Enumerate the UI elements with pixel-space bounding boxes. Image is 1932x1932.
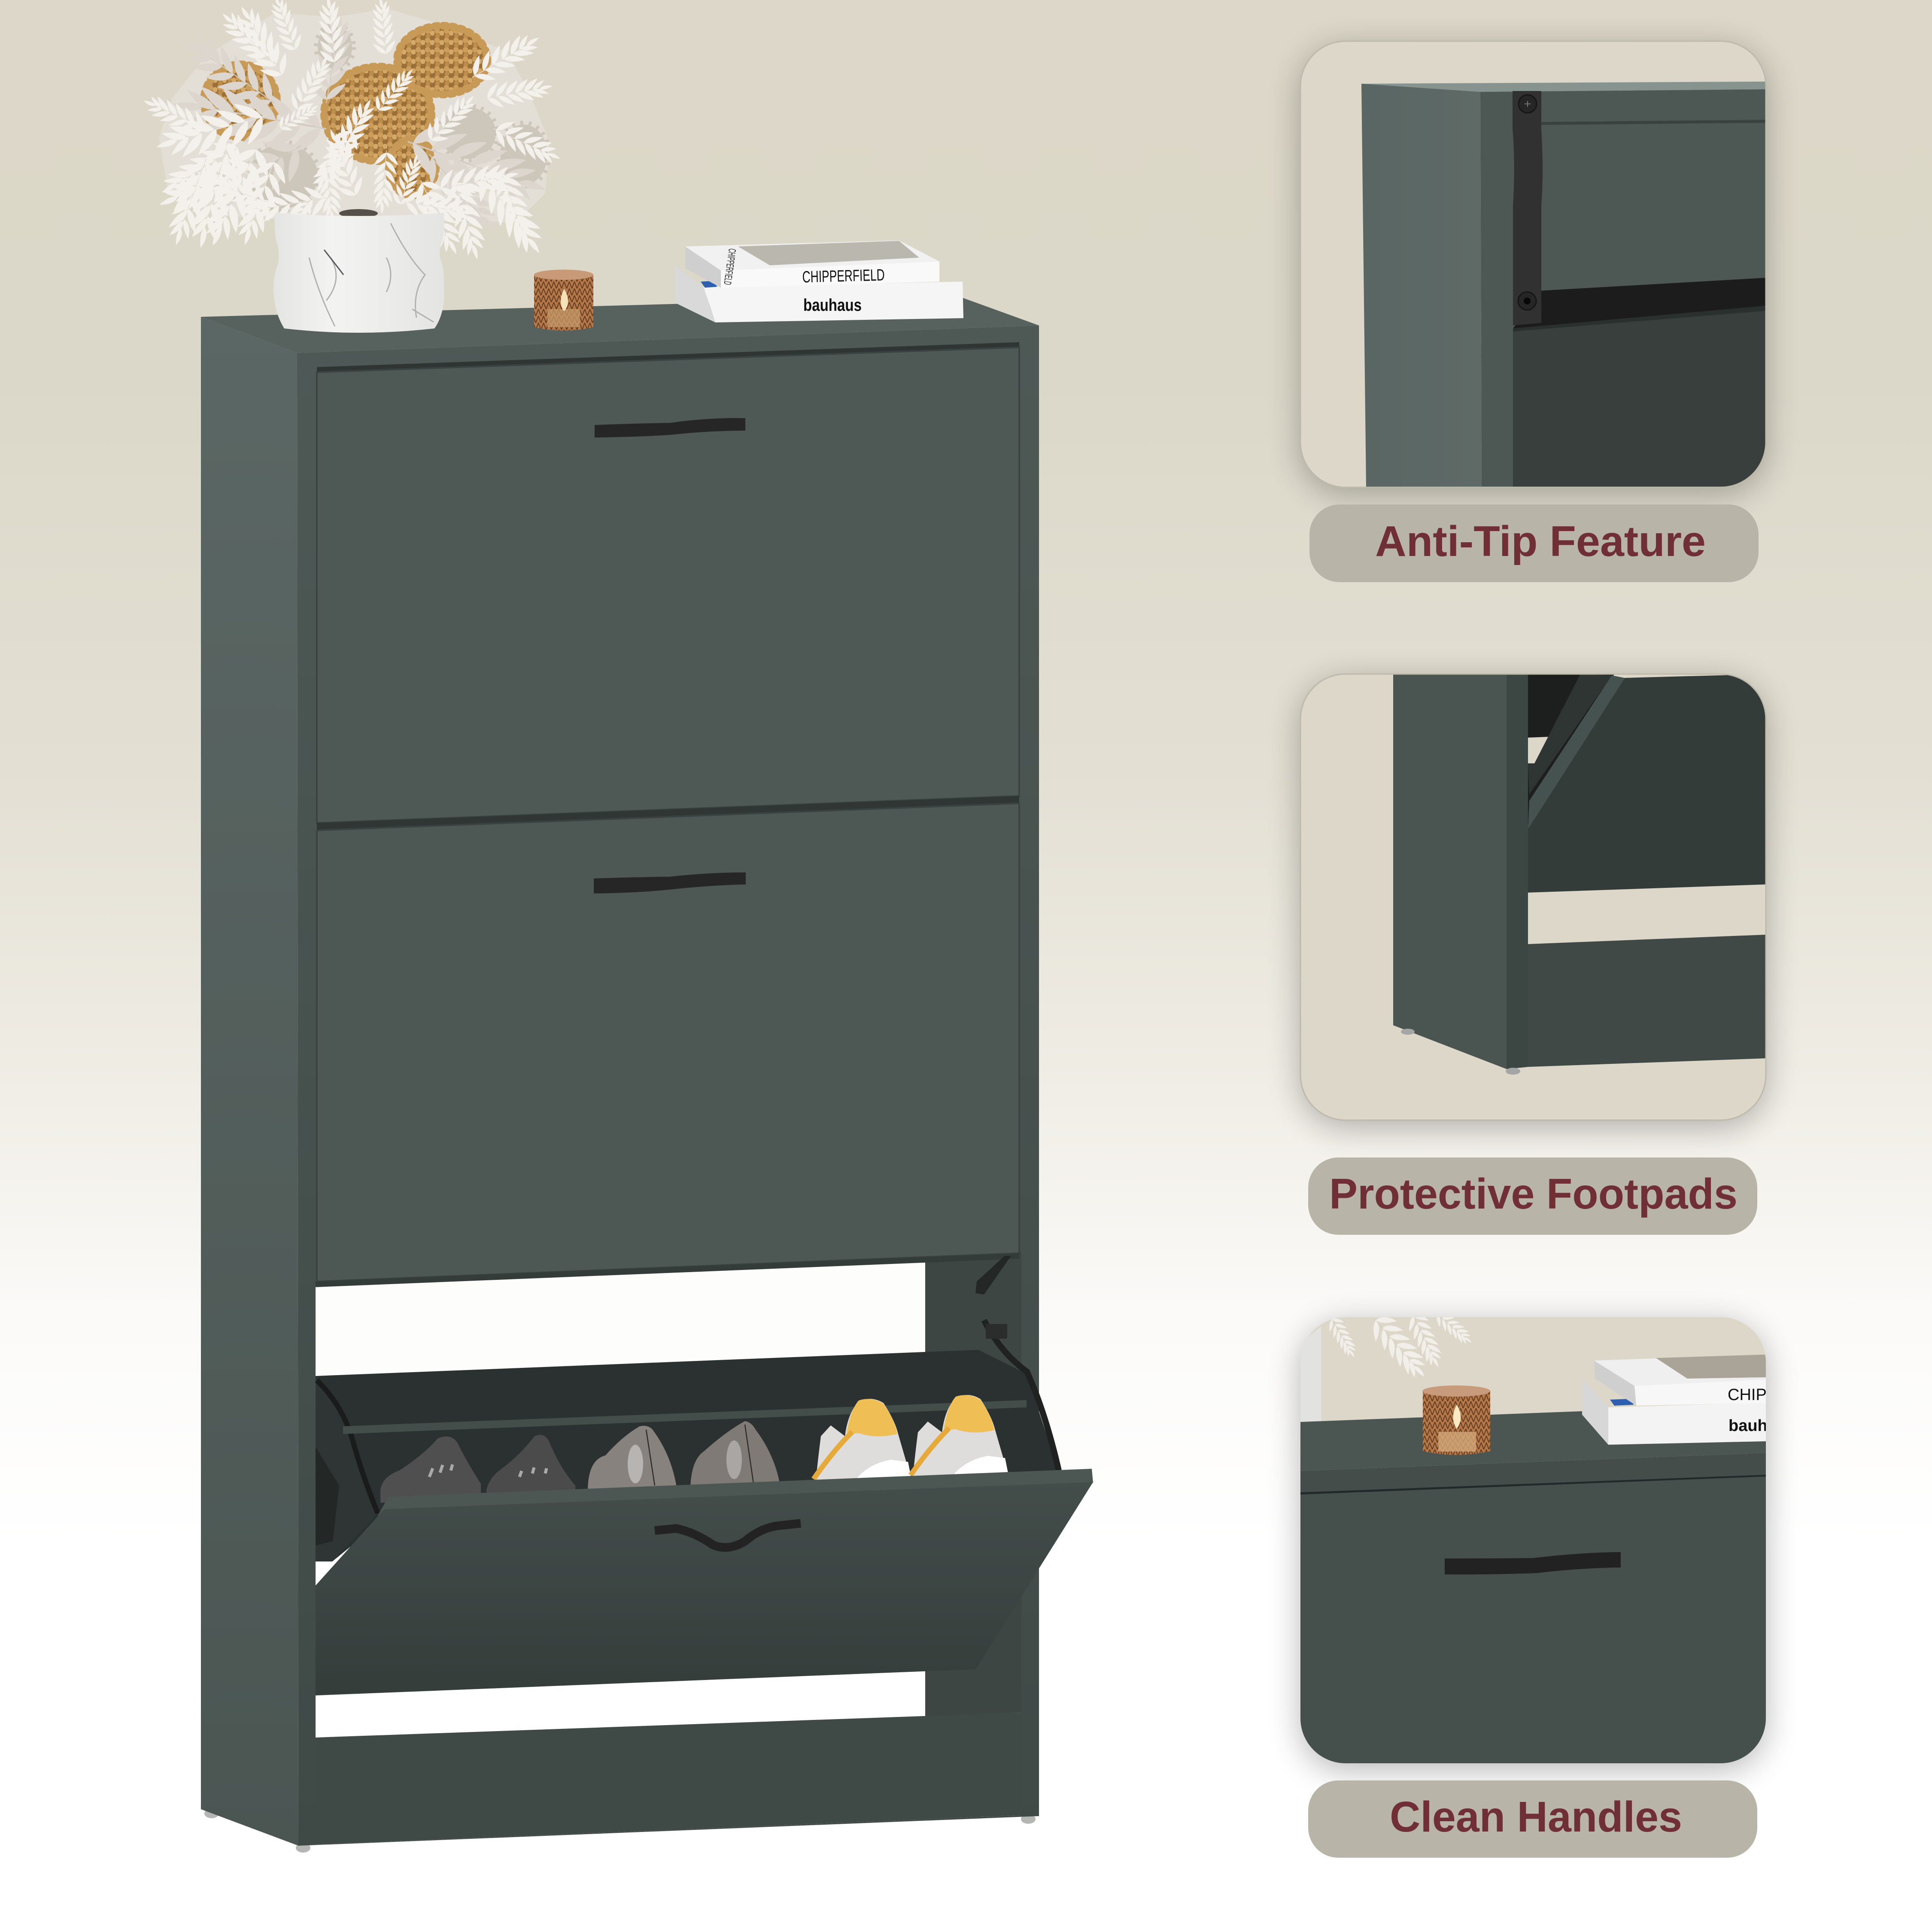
- white leaf sprigs: [137, 0, 567, 266]
- hinge bracket: [1528, 674, 1612, 794]
- cabinet side: [1361, 84, 1482, 487]
- right inner panel: [925, 1252, 1021, 1716]
- panel shadows: [1300, 48, 1766, 1770]
- drawer flap door: [316, 1482, 1093, 1695]
- door gap: [317, 796, 1019, 830]
- glass candle: [534, 270, 593, 331]
- marble vase: [273, 213, 444, 333]
- label: anti-tip feature: Anti-Tip Feature: [1375, 517, 1706, 565]
- top rail: [1300, 1453, 1766, 1494]
- bouquet mass: [137, 0, 567, 266]
- vase fragment: [1300, 1326, 1321, 1455]
- inner shelf: [343, 1400, 1027, 1434]
- label: protective footpads: Protective Footpads: [1329, 1170, 1738, 1218]
- pampas tufts: [249, 26, 547, 208]
- book titles: CHIPP: [1728, 1386, 1777, 1404]
- shoe pair 1: dark patent: [380, 1435, 575, 1503]
- beige gap: [1528, 737, 1551, 763]
- candle: [1422, 1385, 1490, 1455]
- bottom rail: [1528, 935, 1766, 1067]
- bauhaus title: bauhaus: [803, 296, 862, 315]
- cabinet top: [1300, 1404, 1766, 1471]
- drawer flap lip: [378, 1469, 1093, 1516]
- leaf fragments: [1323, 1306, 1478, 1388]
- handle: [1445, 1552, 1621, 1574]
- black strip: [1513, 278, 1766, 328]
- left hinge arm: [316, 1378, 378, 1561]
- upper hinge: [975, 1256, 1011, 1294]
- inner cavity: [1513, 310, 1766, 487]
- stacked books: [675, 240, 963, 322]
- main shoe cabinet: [201, 296, 1093, 1853]
- flap handle: [655, 1523, 801, 1547]
- books: bauh: [1728, 1417, 1768, 1435]
- upper book: [685, 240, 939, 288]
- grey leaf sprigs: [167, 9, 556, 245]
- books: [1582, 1355, 1777, 1445]
- door 2 handle: [594, 872, 746, 893]
- door 1: [317, 342, 1019, 823]
- cabinet side: [1393, 674, 1507, 1069]
- dark cavity: [1528, 674, 1614, 829]
- door 2: [316, 803, 1019, 1287]
- anti-tip strap: [1513, 91, 1543, 325]
- cabinet top edge: [1361, 82, 1766, 92]
- door 1 handle: [595, 418, 745, 437]
- upper book: CHIPPERFIELD: [721, 248, 738, 286]
- cabinet front: [1480, 89, 1766, 487]
- shoe pair 3: white and yellow sneakers: [814, 1395, 1009, 1481]
- open drawer: [316, 1320, 1093, 1695]
- panel: anti-tip feature: [1300, 41, 1766, 487]
- open flap: [1528, 674, 1766, 893]
- lower book: [675, 265, 963, 322]
- bottom rail: [316, 1713, 1021, 1844]
- label: clean handles: Clean Handles: [1390, 1793, 1682, 1841]
- door gap line: [1300, 1475, 1766, 1495]
- vase with dried bouquet: [137, 0, 567, 333]
- right hinge arm: [984, 1320, 1059, 1470]
- vase opening shadow: [339, 209, 378, 218]
- chipperfield title: CHIPPERFIELD: [802, 266, 885, 286]
- ochre seed clusters: [204, 26, 487, 195]
- panel: clean handles: [1300, 1306, 1777, 1763]
- front stile: [1507, 674, 1528, 1069]
- door gap line: [1541, 120, 1766, 125]
- label: anti-tip feature: [1309, 504, 1759, 582]
- cabinet top surface: [201, 296, 1039, 353]
- screw bottom: [1518, 292, 1536, 310]
- screw top: [1519, 95, 1537, 113]
- flap edge: [1528, 675, 1625, 829]
- footpads: [1401, 1029, 1520, 1075]
- panel: protective footpads: [1300, 674, 1766, 1120]
- door 2 underside: [316, 1253, 1019, 1287]
- drawer back wall: [316, 1350, 1060, 1561]
- label: clean handles: [1308, 1780, 1757, 1858]
- cabinet side panel: [201, 317, 298, 1846]
- label: protective footpads: [1308, 1157, 1757, 1235]
- shoe pair 2: grey: [588, 1421, 780, 1490]
- foot pads: [204, 1809, 1036, 1853]
- white opening lower: [316, 1671, 925, 1738]
- white opening upper: [316, 1262, 925, 1380]
- front frame: [297, 325, 1039, 1846]
- door: [1300, 1476, 1766, 1763]
